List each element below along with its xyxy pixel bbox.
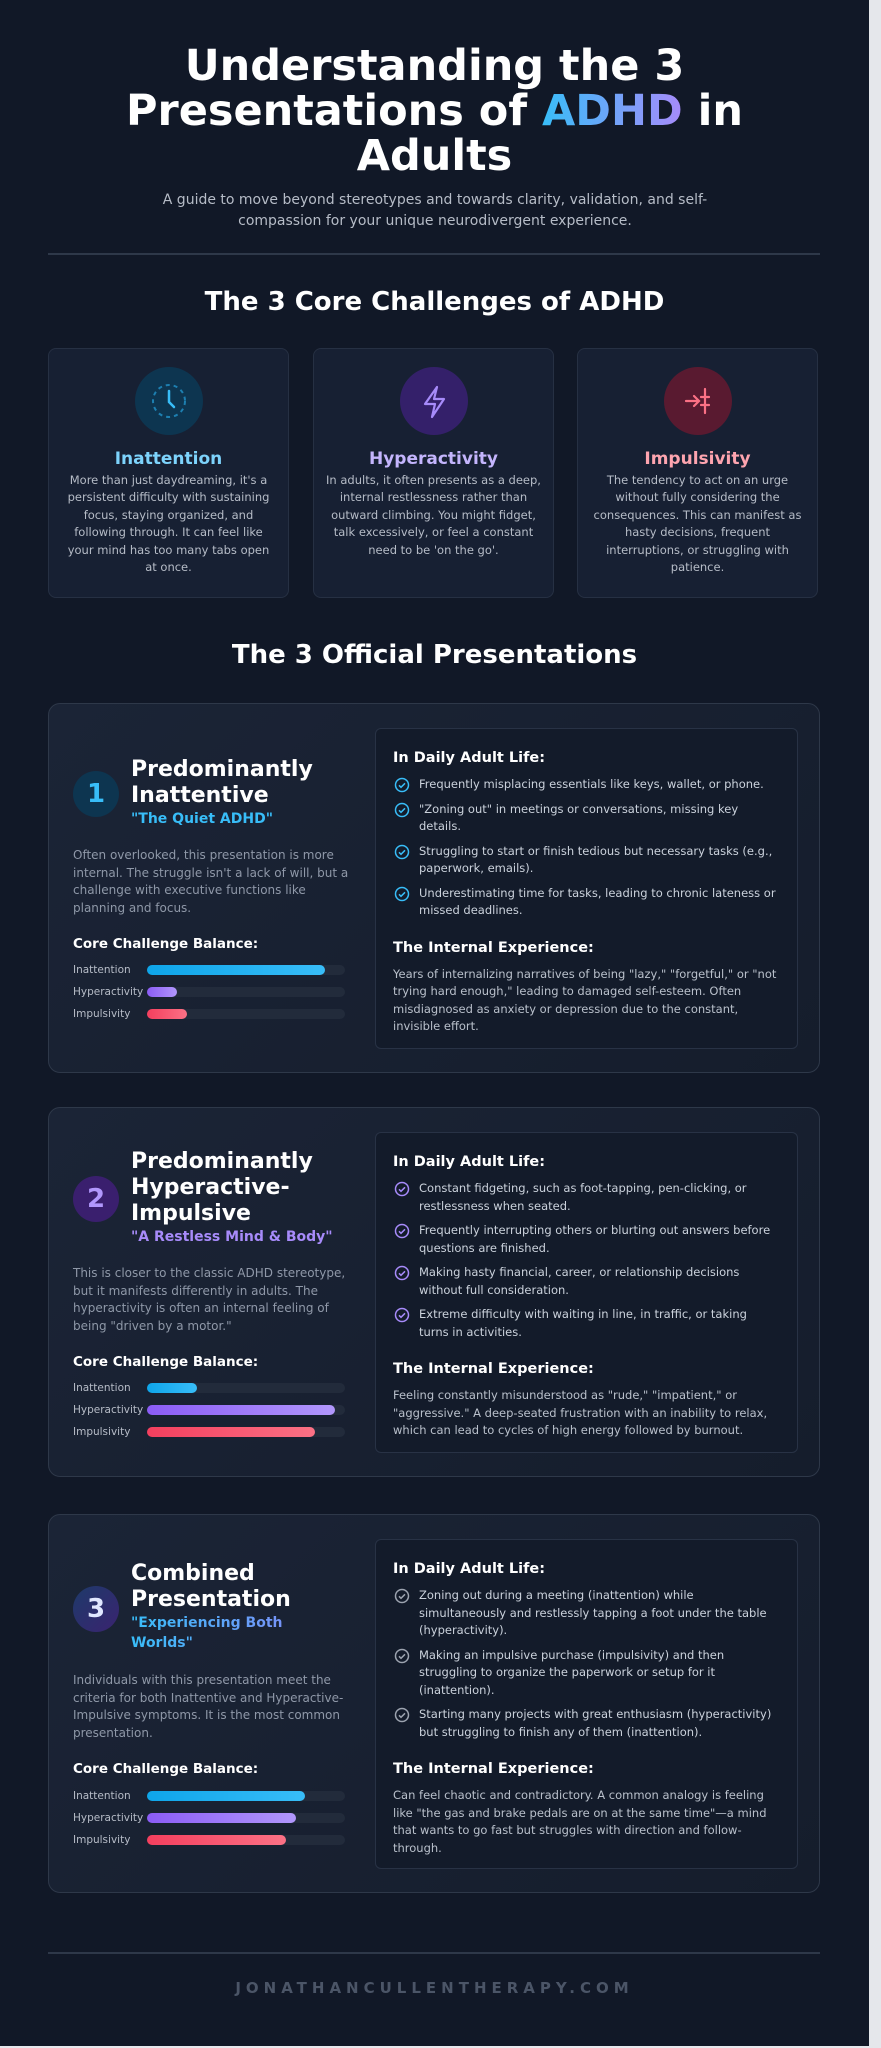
details box 1: Underestimating time for tasks, leading to chronic lateness or missed deadlines. [419,886,776,917]
title: Understanding the 3 [185,41,684,91]
details box 1: The Internal Experience: [393,940,594,956]
details box 2: Making hasty financial, career, or relationship decisions without full consideration. [419,1265,739,1296]
bar chart 1 [73,964,345,1020]
icon: arrow to bar [664,367,732,435]
title 2: Hyperactive- [131,1175,290,1200]
title 1 [131,757,313,827]
details box 1: Struggling to start or finish tedious but necessary tasks (e.g., paperwork, emails). [419,844,772,875]
bar chart 3: Inattention [73,1790,131,1802]
bar chart 1: Inattention [73,964,131,976]
details box 2: The Internal Experience: [393,1361,594,1377]
details box 1: "Zoning out" in meetings or conversations, missing key details. [419,802,738,833]
heading: official presentations: The 3 Official Presentations [232,640,637,670]
number badge 3 [73,1586,119,1632]
number badge 1: 1 [87,779,105,809]
title 2: "A Restless Mind & Body" [131,1229,333,1245]
title 1: "The Quiet ADHD" [131,811,273,827]
bar chart 2: Inattention [73,1382,131,1394]
panel: presentation 3 [48,1514,820,1893]
card: impulsivity [577,348,818,598]
balance heading: Core Challenge Balance: [73,936,258,952]
title 2: Predominantly [131,1149,313,1174]
heading: core challenges: The 3 Core Challenges of ADHD [205,287,664,317]
number badge 2: 2 [87,1184,105,1214]
title 2 [131,1149,333,1245]
balance heading: Core Challenge Balance: [73,1354,258,1370]
description 2: This is closer to the classic ADHD stereotype, but it manifests differently in adults. The hyperactivity is often an internal feeling of being "driven by a motor." [73,1266,345,1332]
bar chart 1: Impulsivity [73,1008,130,1020]
details box 3: Starting many projects with great enthusiasm (hyperactivity) but struggling to finish any of them (inattention). [419,1707,771,1738]
title 3: "Experiencing Both Worlds" [131,1615,282,1651]
number badge 3: 3 [87,1594,105,1624]
title 3: Presentation [131,1587,291,1612]
card: hyperactivity: Hyperactivity [369,449,498,469]
title 1: Inattentive [131,783,269,808]
card: inattention: More than just daydreaming, it's a persistent difficulty with sustaining focus, staying organized, and following through. It can feel like your mind has too many tabs open at once. [68,473,269,574]
title: Presentations of ADHD in [126,86,743,136]
details box 2 [375,1132,798,1453]
card: impulsivity: Impulsivity [644,449,751,469]
title 1: Predominantly [131,757,313,782]
title: Adults [357,131,512,181]
number badge 1 [73,771,119,817]
details box 2: Extreme difficulty with waiting in line, in traffic, or taking turns in activities. [419,1307,747,1338]
description 1: Often overlooked, this presentation is more internal. The struggle isn't a lack of will, but a challenge with executive functions like planning and focus. [73,848,348,914]
icon: clock [135,367,203,435]
card: hyperactivity: In adults, it often presents as a deep, internal restlessness rather than outward climbing. You might fidget, talk excessively, or feel a constant need to be 'on the go'. [326,473,541,557]
title 3 [131,1561,291,1651]
footer: JONATHANCULLENTHERAPY.COM [235,1979,634,1997]
details box 1: Years of internalizing narratives of being "lazy," "forgetful," or "not trying hard enough," leading to damaged self-esteem. Often misdiagnosed as anxiety or depression due to the constant, invisible effort. [393,966,776,1033]
details box 2: In Daily Adult Life: [393,1154,545,1170]
panel: presentation 1 [48,703,820,1073]
bar chart 2: Impulsivity [73,1426,130,1438]
details box 3 [375,1539,798,1869]
details box 3: The Internal Experience: [393,1761,594,1777]
details box 2: Feeling constantly misunderstood as "rude," "impatient," or "aggressive." A deep-seated frustration with an inability to relax, which can lead to cycles of high energy followed by burnout. [393,1388,767,1437]
bar chart 3: Hyperactivity [73,1812,143,1824]
card: inattention: Inattention [115,449,222,469]
card: hyperactivity [313,348,554,598]
details box 1 [375,728,798,1049]
panel: presentation 2 [48,1107,820,1477]
bar chart 3: Impulsivity [73,1834,130,1846]
subtitle: A guide to move beyond stereotypes and towards clarity, validation, and self-compassion for your unique neurodivergent experience. [163,192,707,229]
description 3: Individuals with this presentation meet the criteria for both Inattentive and Hyperactive-Impulsive symptoms. It is the most common presentation. [73,1673,343,1740]
details box 2: Constant fidgeting, such as foot-tapping, pen-clicking, or restlessness when seated. [419,1181,747,1212]
bar chart 3 [73,1790,345,1846]
title 2: Impulsive [131,1201,251,1226]
details box 1: In Daily Adult Life: [393,750,545,766]
details box 3: Can feel chaotic and contradictory. A common analogy is feeling like "the gas and brake pedals are on at the same time"—a mind that wants to go fast but struggles with direction and follow-through. [393,1788,766,1854]
title [126,41,743,181]
details box 1: Frequently misplacing essentials like keys, wallet, or phone. [419,777,764,791]
icon: lightning [400,367,468,435]
title 3: Combined [131,1561,255,1586]
bar chart 2 [73,1382,345,1438]
bar chart 1: Hyperactivity [73,986,143,998]
card: impulsivity: The tendency to act on an urge without fully considering the consequences. This can manifest as hasty decisions, frequent interruptions, or struggling with patience. [594,473,801,574]
details box 2: Frequently interrupting others or blurting out answers before questions are finished. [419,1223,770,1254]
number badge 2 [73,1176,119,1222]
bar chart 2: Hyperactivity [73,1404,143,1416]
details box 3: Making an impulsive purchase (impulsivity) and then struggling to organize the paperwork or setup for it (inattention). [419,1648,724,1696]
details box 3: In Daily Adult Life: [393,1561,545,1577]
card: inattention [48,348,289,598]
details box 3: Zoning out during a meeting (inattention) while simultaneously and restlessly tapping a foot under the table (hyperactivity). [419,1588,767,1637]
balance heading: Core Challenge Balance: [73,1761,258,1777]
